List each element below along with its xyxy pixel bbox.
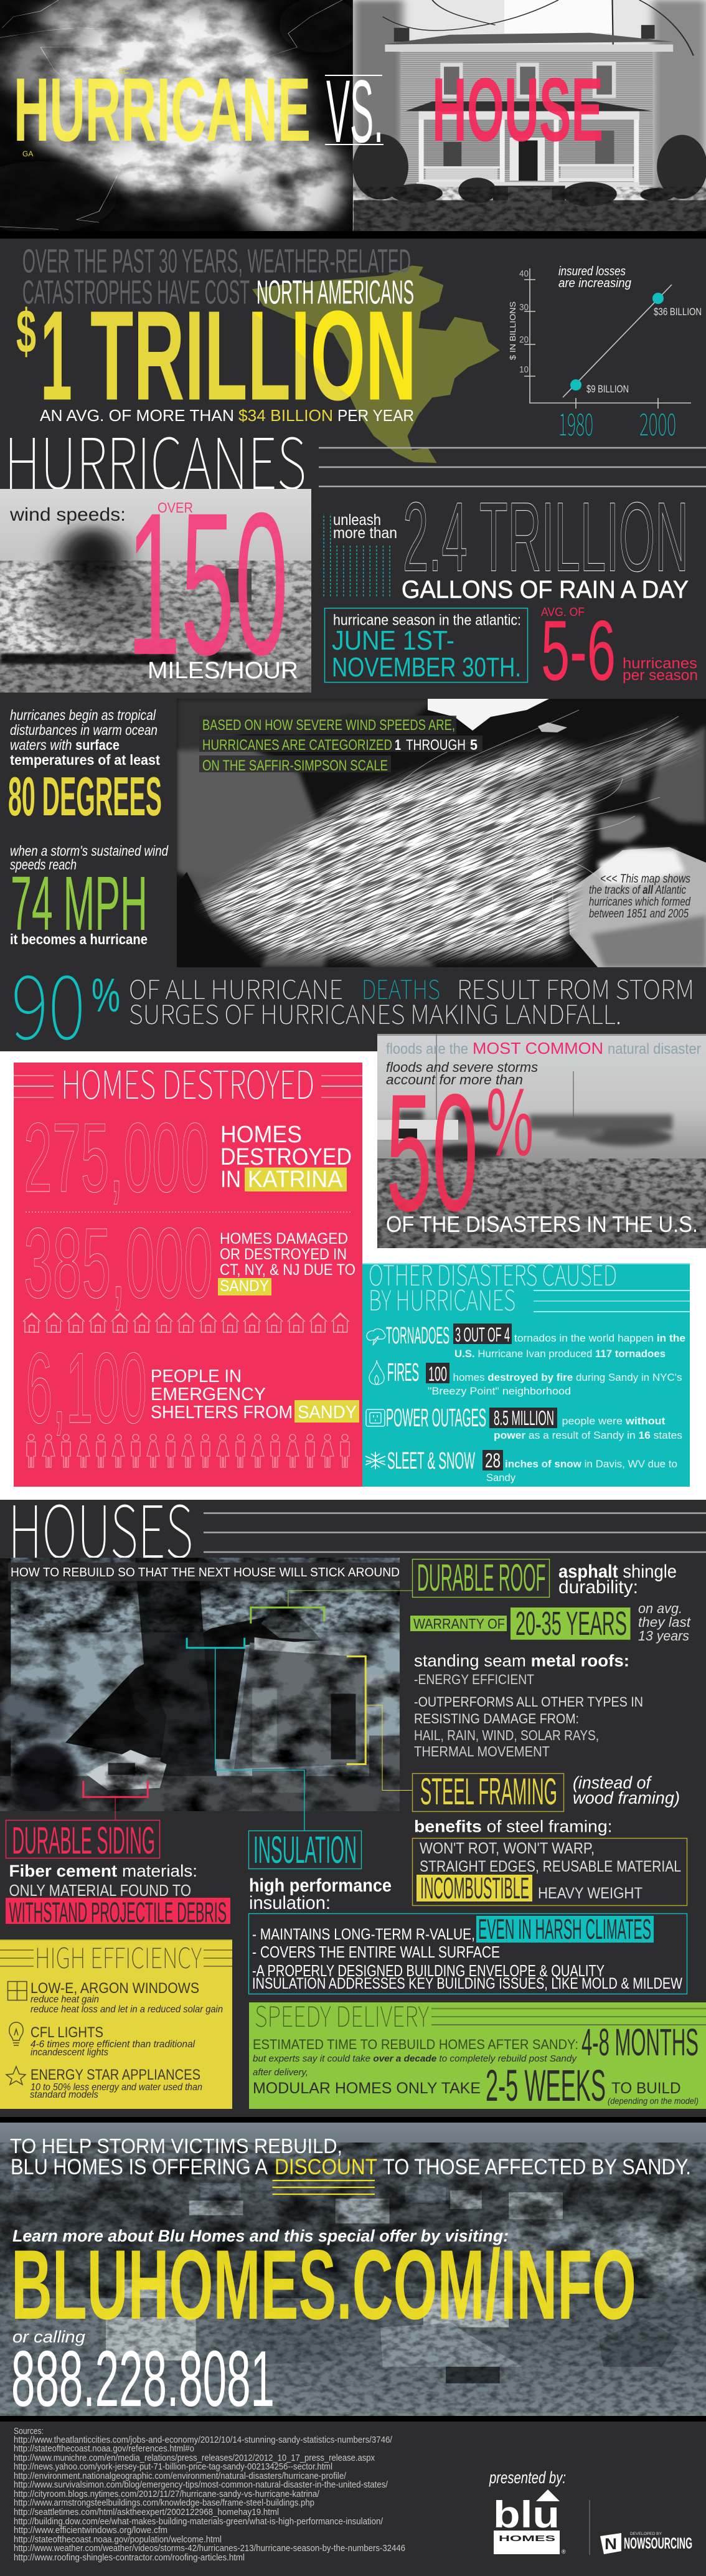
year labels [558, 400, 676, 445]
chart: insured losses are increasing: 20 [519, 334, 529, 345]
panel heading [369, 1253, 690, 1319]
text block: how hurricanes begin [8, 707, 169, 947]
per season [623, 655, 698, 684]
stat: 5-6 hurricanes per season [541, 603, 698, 699]
sources list: http://cityroom.blogs.nytimes.com/2012/11/27/hurricane-sandy-vs-hurricane-katrina/ [14, 2489, 320, 2499]
sources list: http://stateofthecoast.noaa.gov/population/welcome.html [14, 2534, 222, 2545]
benefits box [412, 1839, 687, 1906]
chart: insured losses are increasing: 10 [519, 364, 529, 375]
modular homes: (depending on the model) [608, 2096, 699, 2106]
sources list: http://building.dow.com/ee/what-makes-building-materials-green/what-is-high-performance-insulation/ [14, 2516, 384, 2527]
item: sleet and snow: 28 [485, 1449, 501, 1472]
bracket: siding [83, 1781, 148, 1820]
panel: floods most common disaster: floods are the [386, 1041, 468, 1058]
offer: discount for storm victims: BLU HOMES IS OFFERING A [11, 2155, 268, 2179]
call to action: website [11, 2227, 636, 2340]
heading rules [204, 1513, 706, 1552]
map note: the tracks of all Atlantic [589, 884, 686, 897]
wind threshold: when a storm's sustained wind [10, 843, 169, 859]
item: fires: homes destroyed by fire during Sandy in NYC's [453, 1371, 682, 1383]
section: steel framing [412, 1771, 687, 1906]
gallons: GALLONS OF RAIN A DAY [402, 576, 689, 604]
item: appliances [6, 2067, 202, 2100]
one trillion: TRILLION [90, 284, 417, 427]
panel: high efficiency [0, 1936, 232, 2109]
sources list: Sources: [14, 2426, 44, 2436]
caption band: how to rebuild: HOW TO REBUILD SO THAT THE NEXT HOUSE WILL STICK AROUND [11, 1566, 400, 1579]
lifespan note: on avg. [638, 1601, 682, 1616]
chart: insured losses are increasing: 40 [519, 268, 529, 279]
offer: discount for storm victims: TO HELP STORM VICTIMS REBUILD, [10, 2134, 342, 2157]
modular homes [253, 2062, 699, 2111]
lifespan note: 13 years [638, 1628, 689, 1644]
sources list: http://www.efficientwindows.org/lowe.cfm [14, 2525, 167, 2536]
item: sleet and snow: inches of snow in Davis, WV due to [505, 1458, 677, 1470]
sentence line one: OF ALL HURRICANE [129, 969, 343, 1007]
sentence line one: RESULT FROM STORM [457, 969, 694, 1007]
item: power outages: POWER OUTAGES [386, 1403, 486, 1432]
sentence line one: DEATHS [362, 969, 440, 1007]
rebuild estimate: ESTIMATED TIME TO REBUILD HOMES AFTER SANDY: [253, 2037, 578, 2052]
text block: Saffir-Simpson scale: HURRICANES ARE CATEGORIZED [202, 737, 392, 754]
stat: 90 percent of deaths [11, 936, 694, 1064]
chart note: insured losses [558, 265, 626, 278]
stat: 275,000 Katrina: HOMES [220, 1122, 302, 1148]
insulation box: - COVERS THE ENTIRE WALL SURFACE [252, 1943, 500, 1961]
icon: snowflake [365, 1452, 385, 1469]
logo divider [589, 2500, 590, 2555]
logo: Blu Homes: HOMES [499, 2534, 556, 2543]
white gutter behind disasters panels [0, 1051, 377, 1500]
stat: 385,000 Sandy: HOMES DAMAGED [220, 1230, 348, 1248]
logo: Blu Homes [493, 2489, 566, 2555]
photo: hurricane satellite view [0, 0, 360, 234]
word: Hurricane: HURRICANE [14, 59, 311, 160]
sentence line one [129, 969, 694, 1007]
instead of wood: wood framing) [573, 1788, 680, 1807]
asphalt shingle [558, 1561, 677, 1598]
state labels: GA [22, 149, 33, 158]
season dates: NOVEMBER 30TH. [332, 652, 521, 683]
black band above aerial photo [0, 2117, 706, 2123]
discount word: DISCOUNT [275, 2155, 377, 2179]
over label: OVER [158, 500, 193, 516]
warranty [410, 1605, 630, 1642]
text block: how hurricanes begin: waters with surface [10, 737, 120, 753]
insulation box: -A PROPERLY DESIGNED BUILDING ENVELOPE & QUALITY [252, 1961, 605, 1980]
season dates: JUNE 1ST- [332, 625, 454, 656]
panel: homes destroyed [14, 1054, 362, 1487]
text block: Saffir-Simpson scale: 1 [395, 737, 401, 754]
year labels: 2000 [639, 400, 676, 445]
text block: how hurricanes begin: disturbances in warm ocean [10, 722, 158, 738]
item: power outages: people were without [562, 1415, 666, 1427]
high performance: insulation: [249, 1893, 331, 1913]
one trillion: 1 [40, 284, 72, 427]
average per year: AN AVG. OF MORE THAN [40, 406, 234, 425]
section: durable siding [6, 1819, 230, 1928]
stat: 6,100 shelters: 6,100 [26, 1332, 147, 1444]
stat: 2.4 trillion gallons of rain: more than [333, 524, 397, 542]
average per year: $34 BILLION [238, 406, 333, 425]
item: fires: FIRES [387, 1358, 419, 1386]
high performance [249, 1875, 392, 1913]
section: durable roof [410, 1556, 691, 1759]
item: windows: reduce heat gain [31, 1994, 99, 2005]
axis title: $ IN BILLIONS [508, 301, 517, 360]
panel: floods most common disaster: MOST COMMON [473, 1039, 603, 1058]
black band under hero [0, 231, 706, 239]
text block: Saffir-Simpson scale: THROUGH [406, 737, 466, 754]
wind threshold [10, 843, 169, 873]
50 percent: % [486, 1068, 534, 1176]
icon: outlet [366, 1409, 385, 1426]
panel heading: BY HURRICANES [369, 1278, 515, 1319]
text block: Saffir-Simpson scale: 5 [470, 737, 478, 754]
icon: tornado cloud [367, 1329, 385, 1345]
brackets and connectors on damaged house [83, 1591, 412, 1831]
unit: MILES/HOUR [148, 658, 298, 684]
benefits heading: benefits of steel framing: [414, 1817, 613, 1836]
year labels: 1980 [558, 400, 593, 445]
icon: light bulb [9, 2022, 23, 2045]
stat: 5-6 hurricanes per season: AVG. OF [541, 606, 585, 619]
text block: Saffir-Simpson scale: BASED ON HOW SEVERE WIND SPEEDS ARE, [202, 717, 455, 734]
panel heading: HIGH EFFICIENCY [35, 1936, 202, 1976]
season dates [332, 625, 521, 683]
item: lights [9, 2022, 195, 2058]
state labels: SC [118, 67, 129, 75]
logo: NowSourcing: DEVELOPED BY [630, 2532, 662, 2536]
dotted decoration [319, 514, 394, 597]
average per year: PER YEAR [337, 406, 414, 425]
modular homes: MODULAR HOMES ONLY TAKE [253, 2080, 481, 2097]
heading rules [319, 448, 706, 486]
data labels [586, 306, 702, 395]
callout: hurricane season [325, 608, 528, 683]
photo: damaged house [0, 1558, 400, 1814]
item: sleet and snow: SLEET & SNOW [387, 1448, 475, 1474]
item: appliances: standard models [30, 2090, 98, 2100]
stat: wind speeds over 150 miles per hour: wind speeds: [9, 504, 126, 525]
benefits box: WON'T ROT, WON'T WARP, [420, 1840, 595, 1857]
warranty: WARRANTY OF [413, 1616, 505, 1632]
icon: star [6, 2067, 26, 2085]
stat: 6,100 shelters: EMERGENCY [151, 1385, 266, 1404]
item: lights: CFL LIGHTS [31, 2024, 103, 2041]
headline: weather catastrophes cost [16, 243, 417, 427]
logo: Blu Homes: ® [562, 2549, 566, 2555]
photo: storm wind over water [0, 489, 315, 693]
sources list: http://www.survivalsimon.com/blog/emergency-tips/most-common-natural-disaster-in-the-united-states/ [14, 2479, 388, 2490]
metal roof benefits: THERMAL MOVEMENT [414, 1743, 550, 1759]
metal roof benefits: RESISTING DAMAGE FROM: [414, 1711, 579, 1726]
panel heading: OTHER DISASTERS CAUSED [369, 1253, 617, 1294]
stat: 385,000 Sandy: SANDY [220, 1277, 269, 1295]
item: tornadoes: tornados in the world happen in the [514, 1332, 685, 1344]
50 percent: 50 [386, 1059, 478, 1246]
modular homes: after delivery, [253, 2067, 308, 2078]
stat: 385,000 Sandy: 385,000 [24, 1207, 213, 1319]
item: appliances: ENERGY STAR APPLIANCES [31, 2067, 200, 2083]
sources list: http://www.roofing-shingles-contractor.com/roofing-articles.html [14, 2552, 245, 2563]
stat: 6,100 shelters: SHELTERS FROM [151, 1403, 293, 1423]
stat: 275,000 Katrina: KATRINA [248, 1167, 343, 1193]
icons: people row [27, 1434, 349, 1467]
text block: how hurricanes begin: hurricanes begin as tropical [10, 707, 156, 723]
per season: per season [623, 667, 698, 684]
stat: 90 percent of deaths: 90 [11, 936, 85, 1064]
icons: houses row [23, 1313, 349, 1332]
metal roof benefits [414, 1672, 643, 1759]
insulation box [249, 1913, 687, 1994]
map note [589, 873, 691, 921]
call to action: phone [11, 2327, 275, 2423]
icon: window [7, 1982, 27, 2001]
sources list: http://seattletimes.com/html/asktheexpert/2002122968_homehay19.html [14, 2507, 279, 2517]
floods account text [386, 1059, 538, 1087]
insulation box: - MAINTAINS LONG-TERM R-VALUE, [252, 1926, 475, 1943]
asphalt shingle: durability: [558, 1577, 638, 1598]
high performance: high performance [249, 1875, 392, 1896]
panel heading: SPEEDY DELIVERY [255, 1994, 429, 2035]
item: lights: incandescent lights [31, 2047, 108, 2058]
text block: how hurricanes begin: temperatures of at least [10, 752, 160, 768]
headline: weather catastrophes cost: CATASTROPHES HAVE COST [22, 274, 250, 311]
bracket: steel framing [347, 1656, 412, 1791]
stat: 385,000 Sandy: CT, NY, & NJ DUE TO [220, 1261, 355, 1279]
sources list: http://www.munichre.com/en/media_relations/press_releases/2012/2012_10_17_press_release.aspx [14, 2453, 375, 2463]
stat: 275,000 Katrina: IN [220, 1167, 241, 1193]
panel heading: HOMES DESTROYED [61, 1054, 314, 1110]
call to action: phone: or calling [12, 2327, 85, 2346]
text block: how hurricanes begin: 74 MPH [11, 861, 148, 947]
metal roof benefits: HAIL, RAIN, WIND, SOLAR RAYS, [414, 1727, 599, 1743]
withstand debris [6, 1896, 230, 1928]
photo: flooded cars [377, 1034, 706, 1248]
callout: hurricane season: hurricane season in the atlantic: [333, 612, 521, 629]
sentence line two: SURGES OF HURRICANES MAKING LANDFALL. [129, 994, 621, 1032]
data points [570, 293, 664, 391]
stat: wind speeds over 150 miles per hour [9, 471, 298, 698]
text: NORTH AMERICANS [257, 274, 414, 311]
chart: insured losses are increasing: 30 [519, 302, 529, 313]
item: fires: "Breezy Point" neighborhood [428, 1385, 571, 1397]
section: insulation [249, 1829, 687, 1994]
item: tornadoes: TORNADOES [386, 1323, 449, 1349]
stat: 6,100 shelters: SANDY [298, 1403, 357, 1423]
instead of wood: (instead of [573, 1773, 652, 1792]
section: insulation: INSULATION [253, 1829, 357, 1871]
offer: discount for storm victims [10, 2134, 691, 2194]
heading: Houses: HOUSES [8, 1474, 193, 1579]
stat: 385,000 Sandy: OR DESTROYED IN [220, 1246, 347, 1263]
floods account text: floods and severe storms [386, 1059, 538, 1075]
discount underlines [273, 2181, 375, 2194]
item: power outages: power as a result of Sandy in 16 states [494, 1429, 682, 1441]
logo: Blu Homes: blu [493, 2494, 560, 2536]
stat: 275,000 Katrina: 275,000 [24, 1103, 209, 1213]
text: 80 DEGREES [8, 765, 162, 827]
title: Hurricane vs. House [14, 59, 603, 161]
stat: wind speeds over 150 miles per hour: 150 [127, 471, 288, 698]
lifespan note [638, 1601, 691, 1644]
metal roofs: standing seam metal roofs: [414, 1652, 629, 1670]
panel: speedy delivery [249, 1994, 706, 2111]
bracket: insulation [187, 1638, 304, 1831]
chart: insured losses are increasing [508, 265, 702, 445]
experts note: but experts say it could take over a decade to completely rebuild post Sandy [253, 2053, 578, 2064]
stat: 2.4 trillion gallons of rain [333, 482, 689, 604]
presented by: presented by: [489, 2468, 566, 2487]
chart note: are increasing [558, 277, 631, 290]
fiber cement: Fiber cement materials: [9, 1862, 197, 1880]
text block: Saffir-Simpson scale [199, 716, 482, 774]
item: windows [7, 1980, 223, 2015]
photo: aerial flooded neighborhood [0, 2123, 706, 2416]
map: North America silhouette [252, 265, 500, 463]
5-6: 5-6 [541, 603, 616, 699]
sources list [14, 2426, 405, 2563]
item: sleet and snow [365, 1448, 677, 1484]
logo: NowSourcing [600, 2532, 692, 2554]
stat: 275,000 Katrina: DESTROYED [220, 1144, 352, 1170]
one trillion [40, 284, 417, 427]
item: tornadoes: 3 OUT OF 4 [455, 1324, 510, 1346]
item: windows: LOW-E, ARGON WINDOWS [31, 1980, 199, 1997]
item: tornadoes: U.S. Hurricane Ivan produced 117 tornadoes [454, 1348, 666, 1360]
wind threshold: speeds reach [10, 856, 77, 873]
item: windows: reduce heat loss and let in a reduced solar gain [31, 2004, 223, 2015]
rebuild estimate [253, 2021, 699, 2063]
item: fires [369, 1358, 682, 1397]
call to action: website: Learn more about Blu Homes and this special offer by visiting: [12, 2227, 509, 2245]
text: WITHSTAND PROJECTILE DEBRIS [9, 1896, 227, 1928]
heading: Hurricanes: HURRICANES [4, 407, 306, 509]
metal roof benefits: -OUTPERFORMS ALL OTHER TYPES IN [414, 1694, 643, 1710]
panel: other disasters caused by hurricanes [362, 1253, 690, 1487]
item: sleet and snow: Sandy [486, 1472, 515, 1484]
lifespan note: they last [638, 1614, 691, 1630]
sources list: http://www.theatlanticcities.com/jobs-and-economy/2012/10/14-stunning-sandy-statistics-numbers/3746/ [14, 2435, 393, 2445]
per season: hurricanes [623, 655, 697, 672]
asphalt shingle: asphalt shingle [558, 1561, 677, 1582]
modular homes: TO BUILD [611, 2080, 681, 2097]
sources list: http://news.yahoo.com/york-jersey-put-71-billion-price-tag-sandy-002134256--sector.html [14, 2461, 332, 2472]
average per year [40, 406, 414, 425]
item: lights: 4-6 times more efficient than traditional [31, 2039, 195, 2050]
data labels: $9 BILLION [586, 383, 629, 395]
sources list: http://www.weather.com/weather/videos/storms-42/hurricanes-213/hurricane-season-by-the-numbers-32446 [14, 2543, 405, 2554]
stat: 2.4 trillion gallons of rain: unleash [333, 511, 381, 529]
section: durable siding: DURABLE SIDING [12, 1819, 155, 1862]
text block: Saffir-Simpson scale: ON THE SAFFIR-SIMPSON SCALE [202, 757, 388, 774]
item: appliances: 10 to 50% less energy and water used than [31, 2082, 202, 2093]
item: tornadoes [367, 1323, 685, 1360]
metal roof benefits: -ENERGY EFFICIENT [414, 1672, 534, 1687]
bracket: roof [251, 1591, 412, 1624]
sources list: http://environment.nationalgeographic.com/environment/natural-disasters/hurricane-profile/ [14, 2471, 347, 2481]
black band below aerial photo [0, 2416, 706, 2422]
dollar sign: $ [16, 296, 36, 366]
panel: floods most common disaster [386, 1039, 701, 1246]
benefits box: HEAVY WEIGHT [538, 1885, 642, 1902]
stat: 6,100 shelters: PEOPLE IN [151, 1366, 242, 1386]
floods account text: account for more than [386, 1072, 523, 1087]
item: fires: 100 [428, 1363, 447, 1385]
item: power outages: 8.5 MILLION [494, 1406, 554, 1429]
state labels [22, 67, 129, 158]
title: Hurricane vs. House: VS. [326, 62, 384, 161]
photo: intact house [352, 0, 706, 231]
logo: NowSourcing: N [605, 2536, 617, 2553]
sources list: http://www.armstrongsteelbuildings.com/knowledge-base/frame-steel-buildings.php [14, 2498, 314, 2508]
sources list: http://stateofthecoast.noaa.gov/references.html#o [14, 2443, 194, 2454]
white gutter right of disasters panels [377, 1248, 706, 1500]
item: power outages [366, 1403, 682, 1441]
percent sign: % [92, 969, 120, 1022]
map: Atlantic hurricane tracks [177, 699, 706, 967]
icon: flame [369, 1360, 384, 1385]
benefits box: INCOMBUSTIBLE [420, 1872, 529, 1905]
chart note [558, 265, 631, 290]
only material: ONLY MATERIAL FOUND TO [9, 1881, 191, 1900]
instead of wood [573, 1773, 680, 1807]
phone number: 888.228.8081 [11, 2334, 275, 2423]
it becomes a hurricane: it becomes a hurricane [10, 931, 148, 947]
